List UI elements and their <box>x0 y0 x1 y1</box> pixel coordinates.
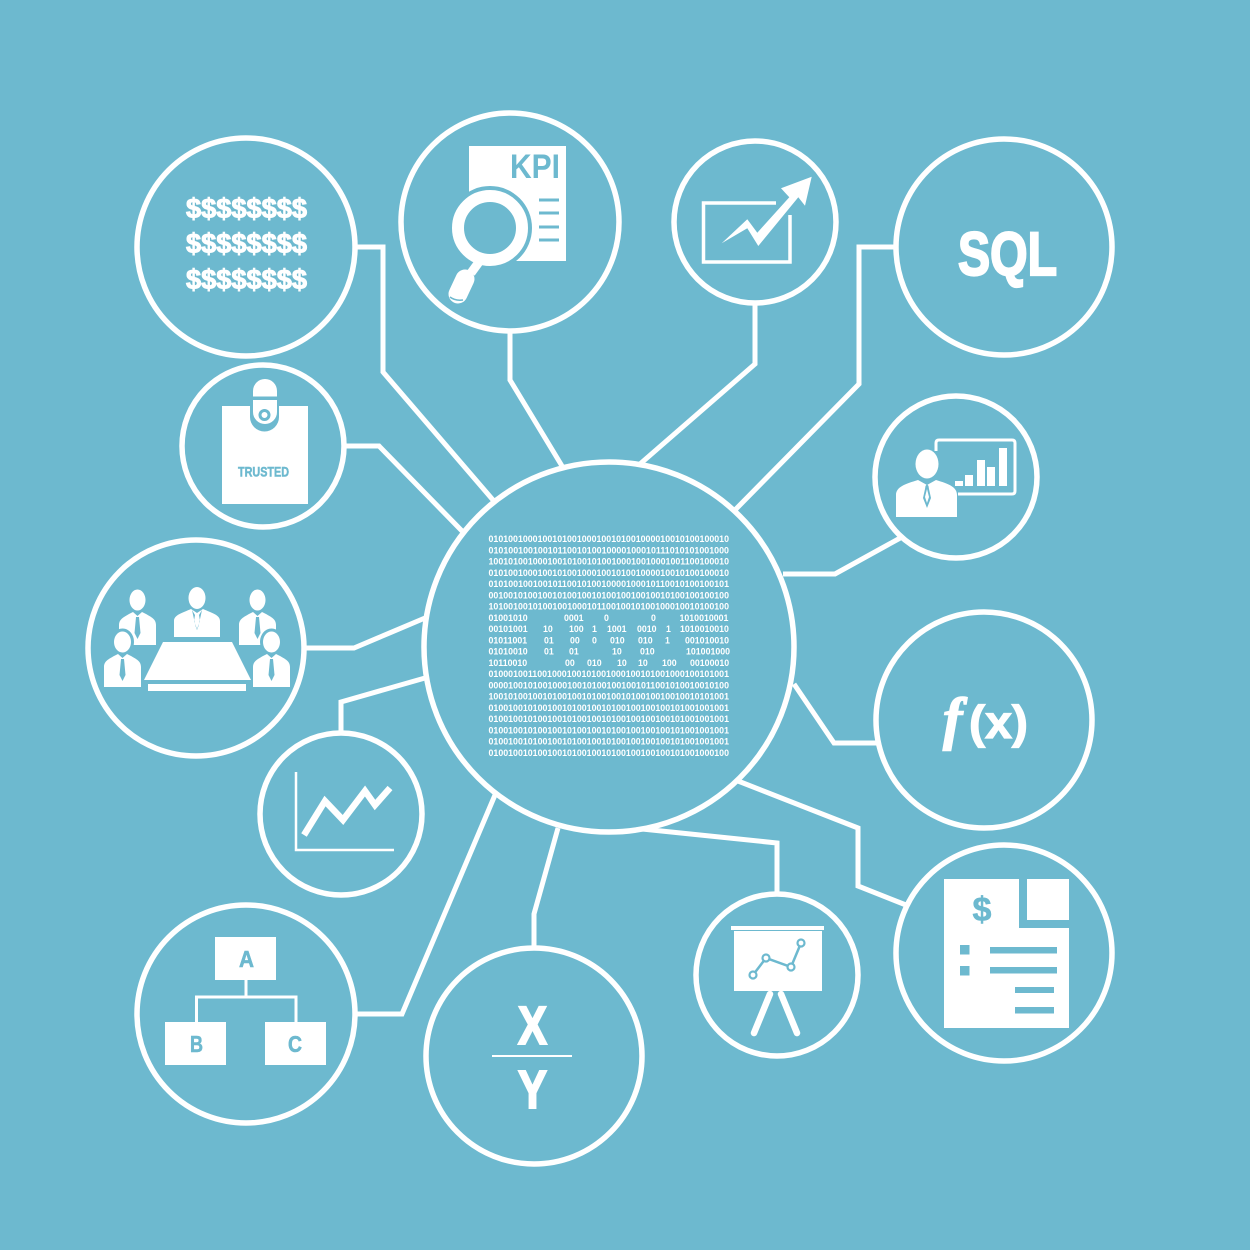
binary text block: 01 <box>569 647 579 657</box>
f(x) label: f <box>943 686 968 751</box>
f(x) label: (x) <box>969 696 1028 748</box>
dollar signs text: $$$$$$$$ <box>186 264 307 295</box>
node: dollars <box>137 138 355 356</box>
binary text block: 1010010001 <box>680 613 729 623</box>
binary text block: 010 <box>610 635 625 645</box>
binary text block: 0 <box>651 613 656 623</box>
binary text block: 0 <box>604 613 609 623</box>
node: line chart <box>260 733 422 895</box>
binary text block: 0100100101001001010010010100100100100101001001001 <box>488 714 729 724</box>
icon: presenter and board <box>896 440 1015 517</box>
dollar signs text: $$$$$$$$ <box>186 193 307 224</box>
binary text block: 0100100101001001010010010100100100100101001001001 <box>488 703 729 713</box>
icon: org chart: A <box>239 946 254 972</box>
fraction label: X <box>518 996 547 1056</box>
binary text block: 10 <box>617 658 627 668</box>
binary text block: 0 <box>592 635 597 645</box>
binary text block: 0101001000100101001000100101001000010010100100010 <box>488 568 729 578</box>
binary text block: 0010 <box>637 624 657 634</box>
icon: people around a table <box>104 587 290 691</box>
node: function f(x) <box>876 612 1092 828</box>
icon: KPI report: KPI <box>510 148 560 186</box>
binary text block: 0100010011001000100101001000100101001000100101001 <box>488 669 729 679</box>
binary text block: 10 <box>638 658 648 668</box>
node: KPI document with magnifier <box>401 113 619 331</box>
binary text block: 0100100101001001010010010100100100100101001001001 <box>488 725 729 735</box>
binary text block: 10 <box>543 624 553 634</box>
node: presentation board <box>696 894 858 1056</box>
dollar signs text <box>186 193 307 295</box>
binary text block: 010 <box>640 647 655 657</box>
icon: org chart <box>165 937 326 1065</box>
binary text block: 0101001001001011001010010000100010110010100100101 <box>488 579 729 589</box>
binary text block: 01 <box>544 647 554 657</box>
binary text block <box>488 534 730 758</box>
icon: clipboard page with clip: TRUSTED <box>238 464 289 480</box>
binary text block: 1 <box>665 635 670 645</box>
SQL label: SQL <box>958 220 1057 288</box>
node: presenter with bar chart <box>875 396 1037 558</box>
binary text block: 0101001000100101001000100101001000010010100100010 <box>488 534 729 544</box>
binary text block: 00101001 <box>488 624 528 634</box>
binary text block: 1010010010 <box>680 624 729 634</box>
icon: invoice document <box>944 879 1069 1028</box>
icon: clipboard page with clip <box>222 379 308 504</box>
person: front left <box>104 630 141 687</box>
binary text block: 10 <box>612 647 622 657</box>
binary text block: 0010010100100101001001010010010010010100100100100 <box>488 590 729 600</box>
binary text block: 1001010010010100100101001001010010010010010101001 <box>488 692 729 702</box>
binary text block: 100 <box>569 624 584 634</box>
fraction label: Y <box>518 1060 547 1120</box>
binary text block: 100 <box>662 658 677 668</box>
person: centre <box>174 587 220 637</box>
binary text block: 00 <box>570 635 580 645</box>
node: trusted clipped paper <box>182 365 344 527</box>
connector lines from hub to nodes <box>303 247 906 1014</box>
icon: easel with line chart <box>731 926 824 1033</box>
person: front right <box>253 630 290 687</box>
node: fraction X over Y <box>426 948 642 1164</box>
icon: org chart: C <box>288 1031 302 1057</box>
binary text block: 01010010 <box>488 647 528 657</box>
f(x) label <box>943 686 1028 751</box>
binary text block: 0001 <box>564 613 584 623</box>
binary text block: 010 <box>638 635 653 645</box>
binary text block: 01011001 <box>488 635 527 645</box>
node: SQL <box>896 139 1112 355</box>
node: meeting table <box>88 540 304 756</box>
icon: KPI report <box>448 146 566 300</box>
node: growth chart with arrow <box>674 141 836 303</box>
binary text block: 1 <box>666 624 671 634</box>
binary text block: 1001010010001001010010100100010010001001100100010 <box>488 556 729 566</box>
binary text block: 0101001001001011001010010000100010111010101001000 <box>488 545 729 555</box>
binary text block: 0100100101001001010010010100100100100101001000100 <box>488 748 729 758</box>
binary text block: 101001000 <box>686 647 730 657</box>
node: hierarchy A B C <box>137 905 355 1123</box>
binary text block: 0100100101001001010010010100100100100101001001001 <box>488 737 729 747</box>
binary text block: 001010010 <box>685 635 729 645</box>
binary text block: 01 <box>544 635 554 645</box>
icon: org chart: B <box>190 1031 203 1057</box>
icon: rising arrow in frame <box>704 177 812 262</box>
binary text block: 1 <box>592 624 597 634</box>
icon: axes and trend line <box>296 772 394 850</box>
dollar signs text: $$$$$$$$ <box>186 228 307 259</box>
person: back right <box>239 590 276 645</box>
binary text block: 10110010 <box>488 658 527 668</box>
binary text block: 1010010010100100100010110010010100100010010100100 <box>488 602 729 612</box>
binary text block: 0000100101001000100101001001001011001010010010100 <box>488 680 729 690</box>
binary text block: 00100010 <box>690 658 729 668</box>
icon: invoice document: $ <box>973 891 992 929</box>
fraction label <box>492 996 572 1120</box>
binary text block: 01001010 <box>488 613 528 623</box>
binary text block: 1001 <box>607 624 627 634</box>
binary text block: 00 <box>565 658 575 668</box>
central hub: binary data circle <box>424 462 794 832</box>
binary text block: 010 <box>587 658 602 668</box>
table <box>144 642 251 691</box>
node: invoice <box>896 845 1112 1061</box>
person: back left <box>119 590 156 645</box>
